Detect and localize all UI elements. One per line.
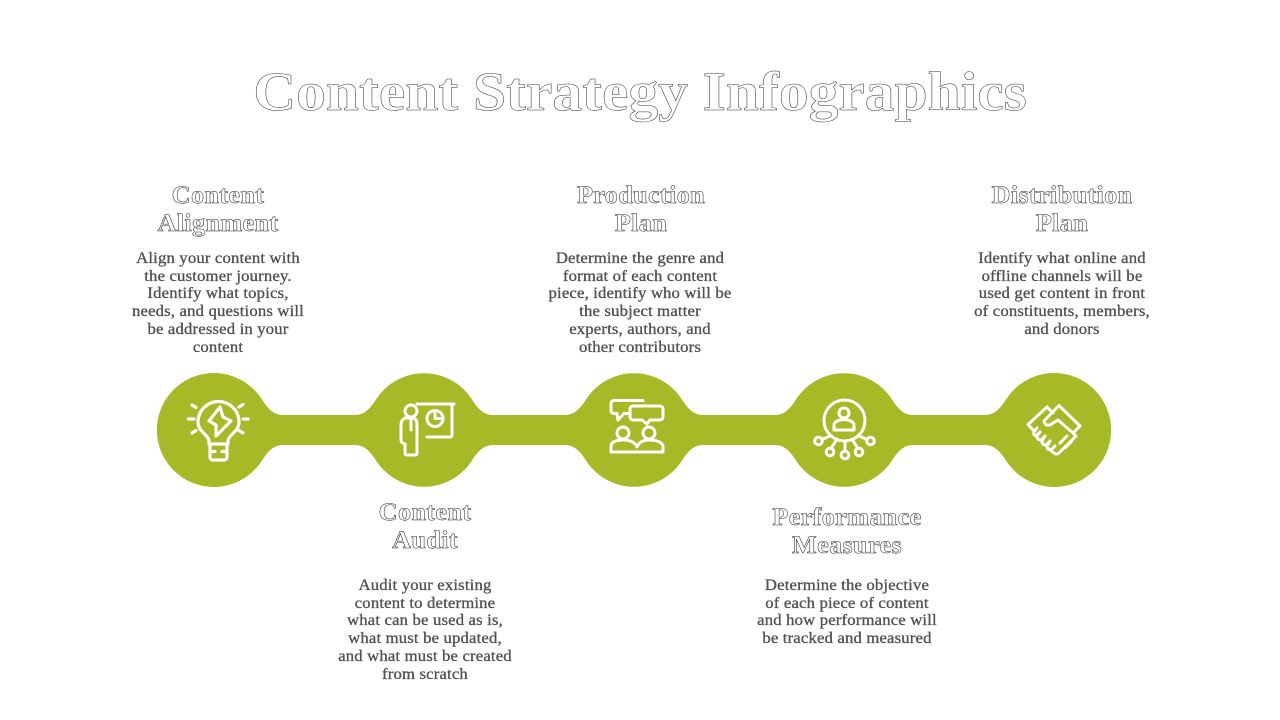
text: Content Alignment description: Identify what topics,: [147, 285, 289, 302]
icon: presenter with chart: [401, 404, 454, 455]
text: Content Alignment description: content: [193, 339, 243, 356]
text: Distribution Plan description: used get content in front: [979, 285, 1145, 302]
text: Content Alignment description: Align your content with: [136, 250, 300, 267]
text: Content Audit description: content to determine: [355, 595, 495, 612]
text: Performance Measures description: Determine the objective: [765, 577, 929, 594]
text: Performance Measures description: of each piece of content: [765, 595, 929, 612]
heading: Content Audit: Content: [379, 499, 471, 526]
heading: Content Audit: [379, 499, 472, 554]
connected green band with five circles: [157, 373, 1111, 487]
section: Content Audit: [338, 499, 512, 683]
text: Content Audit description: from scratch: [382, 666, 468, 683]
heading: Production Plan: Plan: [614, 210, 667, 237]
heading: Distribution Plan: Plan: [1036, 210, 1088, 237]
text: Performance Measures description: [757, 577, 937, 647]
section: Content Alignment: [132, 182, 304, 356]
heading: Production Plan: [576, 182, 705, 237]
heading: Production Plan: Production: [576, 182, 705, 209]
text: Production Plan description: Determine the genre and: [556, 250, 724, 267]
text: Distribution Plan description: of constituents, members,: [974, 303, 1150, 320]
section: Production Plan: [548, 182, 731, 356]
heading: Content Audit: Audit: [392, 527, 458, 554]
text: Distribution Plan description: Identify what online and: [978, 250, 1146, 267]
text: Content Audit description: and what must be created: [338, 648, 512, 665]
section: Performance Measures: [757, 504, 937, 647]
icon: person network: [815, 400, 874, 459]
text: Distribution Plan description: offline channels will be: [982, 268, 1142, 285]
text: Production Plan description: [548, 250, 731, 356]
heading: Content Alignment: [158, 182, 278, 237]
icon: light bulb: [188, 402, 248, 460]
heading: Performance Measures: [772, 504, 922, 559]
title: Content Strategy Infographics: [253, 61, 1027, 122]
heading: Content Alignment: Content: [172, 182, 264, 209]
text: Production Plan description: other contributors: [579, 339, 701, 356]
heading: Distribution Plan: [992, 182, 1132, 237]
text: Production Plan description: the subject matter: [579, 303, 701, 320]
text: Distribution Plan description: and donors: [1024, 321, 1100, 338]
text: Content Audit description: what can be used as is,: [347, 612, 503, 629]
text: Performance Measures description: be tracked and measured: [762, 630, 932, 647]
heading: Performance Measures: Performance: [772, 504, 922, 531]
text: Content Alignment description: the customer journey.: [144, 268, 292, 285]
text: Content Audit description: what must be updated,: [348, 630, 502, 647]
heading: Performance Measures: Measures: [792, 532, 902, 559]
heading: Content Alignment: Alignment: [158, 210, 278, 237]
text: Content Audit description: Audit your existing: [359, 577, 491, 594]
text: Production Plan description: experts, authors, and: [569, 321, 711, 338]
icon: handshake: [1028, 406, 1080, 454]
text: Distribution Plan description: [974, 250, 1150, 338]
section: Distribution Plan: [974, 182, 1150, 338]
text: Content Alignment description: [132, 250, 304, 356]
heading: Distribution Plan: Distribution: [992, 182, 1132, 209]
text: Production Plan description: piece, identify who will be: [549, 285, 731, 302]
text: Content Alignment description: needs, and questions will: [132, 303, 304, 320]
text: Performance Measures description: and how performance will: [757, 612, 937, 629]
text: Content Audit description: [338, 577, 512, 683]
icon: people talking: [611, 400, 663, 452]
text: Production Plan description: format of each content: [563, 268, 717, 285]
text: Content Alignment description: be addressed in your: [148, 321, 288, 338]
